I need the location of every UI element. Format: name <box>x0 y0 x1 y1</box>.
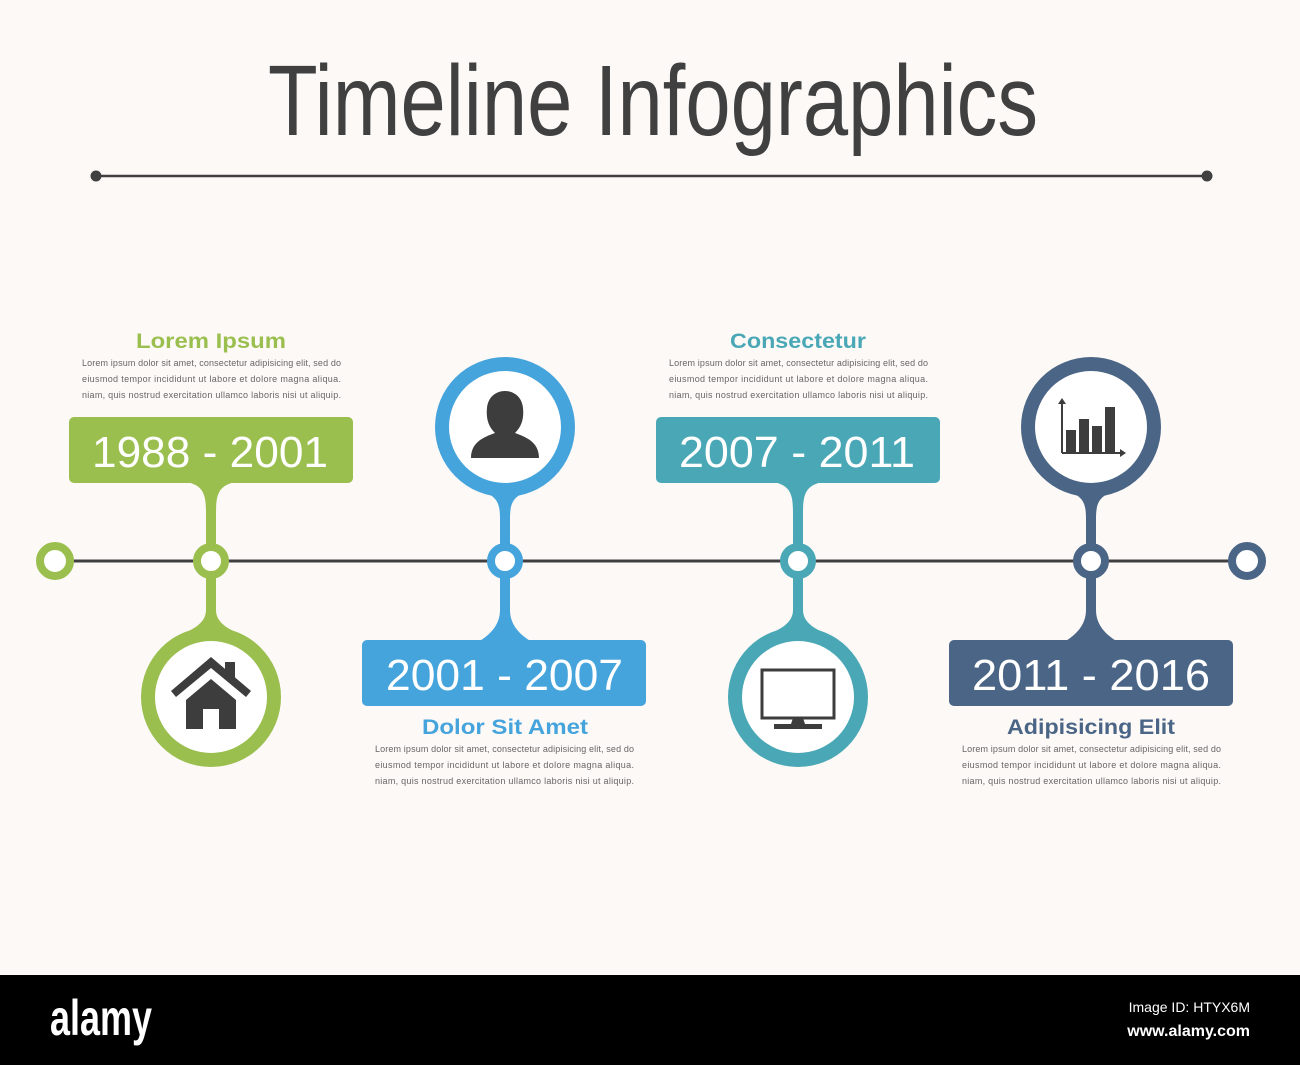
date box <box>69 417 353 483</box>
date box <box>949 640 1233 706</box>
panel: 2001-2007: 2001 - 2007 <box>386 651 623 700</box>
text block: Lorem ipsum dolor sit amet, consectetur adipisicing elit, sed do <box>82 358 341 368</box>
text block: niam, quis nostrud exercitation ullamco laboris nisi ut aliquip. <box>375 776 634 786</box>
connector <box>768 481 828 633</box>
text block: niam, quis nostrud exercitation ullamco laboris nisi ut aliquip. <box>669 390 928 400</box>
text block: niam, quis nostrud exercitation ullamco laboris nisi ut aliquip. <box>962 776 1221 786</box>
text block <box>82 358 341 400</box>
icon: bar chart <box>1021 357 1161 497</box>
connector <box>1061 490 1121 642</box>
text block <box>669 358 928 400</box>
text block: Lorem ipsum dolor sit amet, consectetur adipisicing elit, sed do <box>669 358 928 368</box>
text block: Lorem ipsum dolor sit amet, consectetur adipisicing elit, sed do <box>375 744 634 754</box>
panel: 2001-2007 <box>362 357 646 786</box>
icon: house <box>141 627 281 767</box>
website: www.alamy.com <box>1126 1023 1250 1040</box>
text block: eiusmod tempor incididunt ut labore et dolore magna aliqua. <box>962 760 1221 770</box>
panel: 2011-2016: 2011 - 2016 <box>972 651 1210 700</box>
title: Timeline Infographics <box>268 45 1038 157</box>
connector <box>475 490 535 642</box>
panel: 2011-2016 <box>949 357 1233 786</box>
text block <box>375 744 634 786</box>
panel: 2007-2011: 2007 - 2011 <box>679 428 915 477</box>
heading: Dolor Sit Amet: Dolor Sit Amet <box>422 716 588 739</box>
panel: 1988-2001: 1988 - 2001 <box>92 428 328 477</box>
icon: person <box>435 357 575 497</box>
text block: Lorem ipsum dolor sit amet, consectetur adipisicing elit, sed do <box>962 744 1221 754</box>
text block: eiusmod tempor incididunt ut labore et dolore magna aliqua. <box>669 374 928 384</box>
node <box>1077 547 1105 575</box>
title underline <box>90 170 1212 182</box>
footer bar <box>0 975 1300 1065</box>
date box <box>362 640 646 706</box>
node <box>197 547 225 575</box>
text block <box>962 744 1221 786</box>
node <box>784 547 812 575</box>
panel: 1988-2001 <box>69 330 353 767</box>
date box <box>656 417 940 483</box>
text block: eiusmod tempor incididunt ut labore et dolore magna aliqua. <box>375 760 634 770</box>
connector <box>181 481 241 633</box>
text block: eiusmod tempor incididunt ut labore et dolore magna aliqua. <box>82 374 341 384</box>
text block: niam, quis nostrud exercitation ullamco laboris nisi ut aliquip. <box>82 390 341 400</box>
logo: alamy: alamy <box>50 990 152 1046</box>
icon: monitor <box>728 627 868 767</box>
panel: 2007-2011 <box>656 330 940 767</box>
node <box>491 547 519 575</box>
image id: Image ID: HTYX6M <box>1129 999 1250 1015</box>
heading: Lorem Ipsum: Lorem Ipsum <box>136 330 286 353</box>
timeline axis <box>40 546 1262 576</box>
heading: Adipisicing Elit: Adipisicing Elit <box>1007 716 1175 739</box>
heading: Consectetur: Consectetur <box>730 330 866 353</box>
